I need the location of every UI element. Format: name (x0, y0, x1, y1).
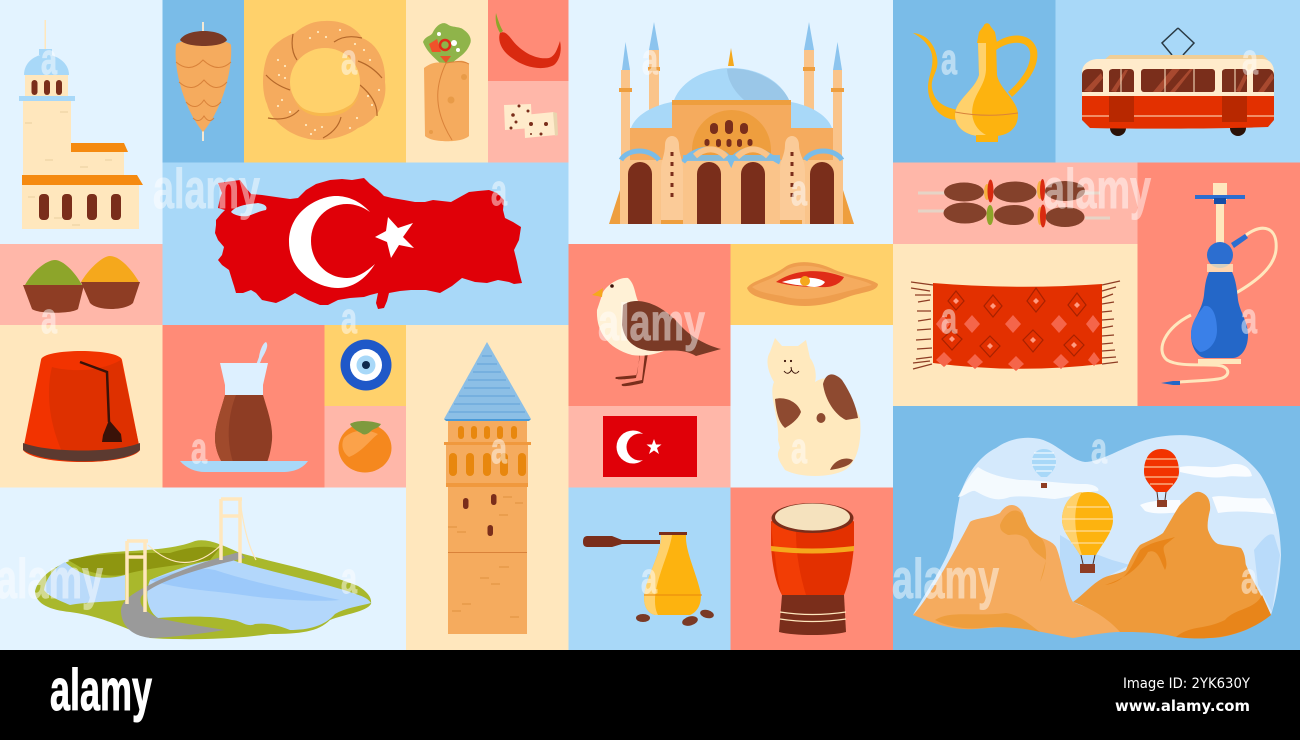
right rock (1073, 492, 1271, 638)
alamy watermarks: a (1242, 35, 1258, 84)
panel: Galata Tower (406, 325, 568, 650)
alamy watermarks: a (642, 35, 658, 84)
footer: image id: Image ID: 2YK630Y (1123, 676, 1250, 692)
road (121, 552, 245, 638)
alamy watermarks: alamy (598, 294, 705, 352)
alamy watermarks: a (941, 294, 957, 343)
balloon: red (1144, 449, 1179, 507)
panel: Turkish tea (162, 325, 324, 488)
panel: spotted cat (730, 325, 893, 488)
alamy watermarks: a (191, 424, 207, 473)
Sea of Marmara (231, 203, 267, 216)
panel: doner kebab (162, 0, 244, 162)
pillars (661, 136, 805, 224)
alamy watermarks: a (791, 166, 807, 215)
panel: persimmon (324, 406, 406, 488)
alamy watermarks: alamy (1044, 157, 1151, 220)
minarets (619, 22, 844, 160)
panel: fez hat (0, 325, 162, 488)
star (375, 217, 414, 258)
balloon: yellow (1062, 492, 1113, 573)
footer: website: www.alamy.com (1115, 697, 1250, 715)
panel: Maiden Tower (0, 0, 162, 244)
alamy watermarks: a (1241, 554, 1257, 603)
panel: darbuka drum (730, 488, 893, 650)
alamy watermarks: a (341, 294, 357, 343)
panel: kebab skewers (893, 162, 1138, 244)
alamy watermarks: a (491, 424, 507, 473)
panel: seagull (568, 244, 730, 406)
clouds (958, 467, 1098, 499)
main body (630, 128, 833, 168)
balloon: blue (1032, 449, 1056, 488)
alamy watermarks: a (941, 35, 957, 84)
panel: evil eye bead (324, 325, 406, 406)
panel: Hagia Sophia (568, 0, 894, 244)
panel: pide flatbread (730, 244, 893, 325)
panel: Bosphorus Bridge (0, 488, 406, 650)
alamy watermarks: a (491, 166, 507, 215)
panel: feta cheese cubes (488, 81, 569, 162)
map outline (215, 178, 522, 309)
panel: durum wrap (406, 0, 488, 162)
alamy watermarks: a (1091, 424, 1107, 473)
alamy watermarks: a (341, 35, 357, 84)
arched doors (628, 162, 834, 224)
alamy watermarks: alamy (892, 547, 999, 610)
land (35, 540, 371, 639)
alamy watermarks (0, 35, 1258, 610)
panel: red chili (488, 0, 569, 81)
alamy watermarks: a (791, 424, 807, 473)
panel: coffee cezve (568, 488, 730, 650)
panel: Cappadocia balloons (893, 406, 1300, 650)
panel: small flag (568, 406, 730, 488)
panel: red tram (1056, 0, 1300, 162)
water (44, 562, 125, 605)
panel: map of Turkey (162, 162, 568, 325)
alamy watermarks: a (1241, 294, 1257, 343)
alamy watermarks: alamy (0, 547, 103, 610)
bridge towers (127, 499, 242, 612)
panel: hookah (1138, 162, 1300, 406)
alamy watermarks: a (41, 294, 57, 343)
panel: golden ewer (893, 0, 1056, 162)
domes (728, 48, 734, 66)
alamy watermarks: a (641, 554, 657, 603)
sky (913, 435, 1281, 615)
panel: spice bowls (0, 244, 162, 325)
left rock (913, 505, 1120, 638)
alamy watermarks: alamy (153, 157, 260, 220)
footer: alamy logo: alamy (50, 658, 152, 723)
panel: simit bread (244, 0, 406, 162)
panel: kilim carpet (893, 244, 1138, 406)
crescent (289, 196, 375, 288)
alamy watermarks: a (341, 554, 357, 603)
alamy watermarks: a (41, 35, 57, 84)
